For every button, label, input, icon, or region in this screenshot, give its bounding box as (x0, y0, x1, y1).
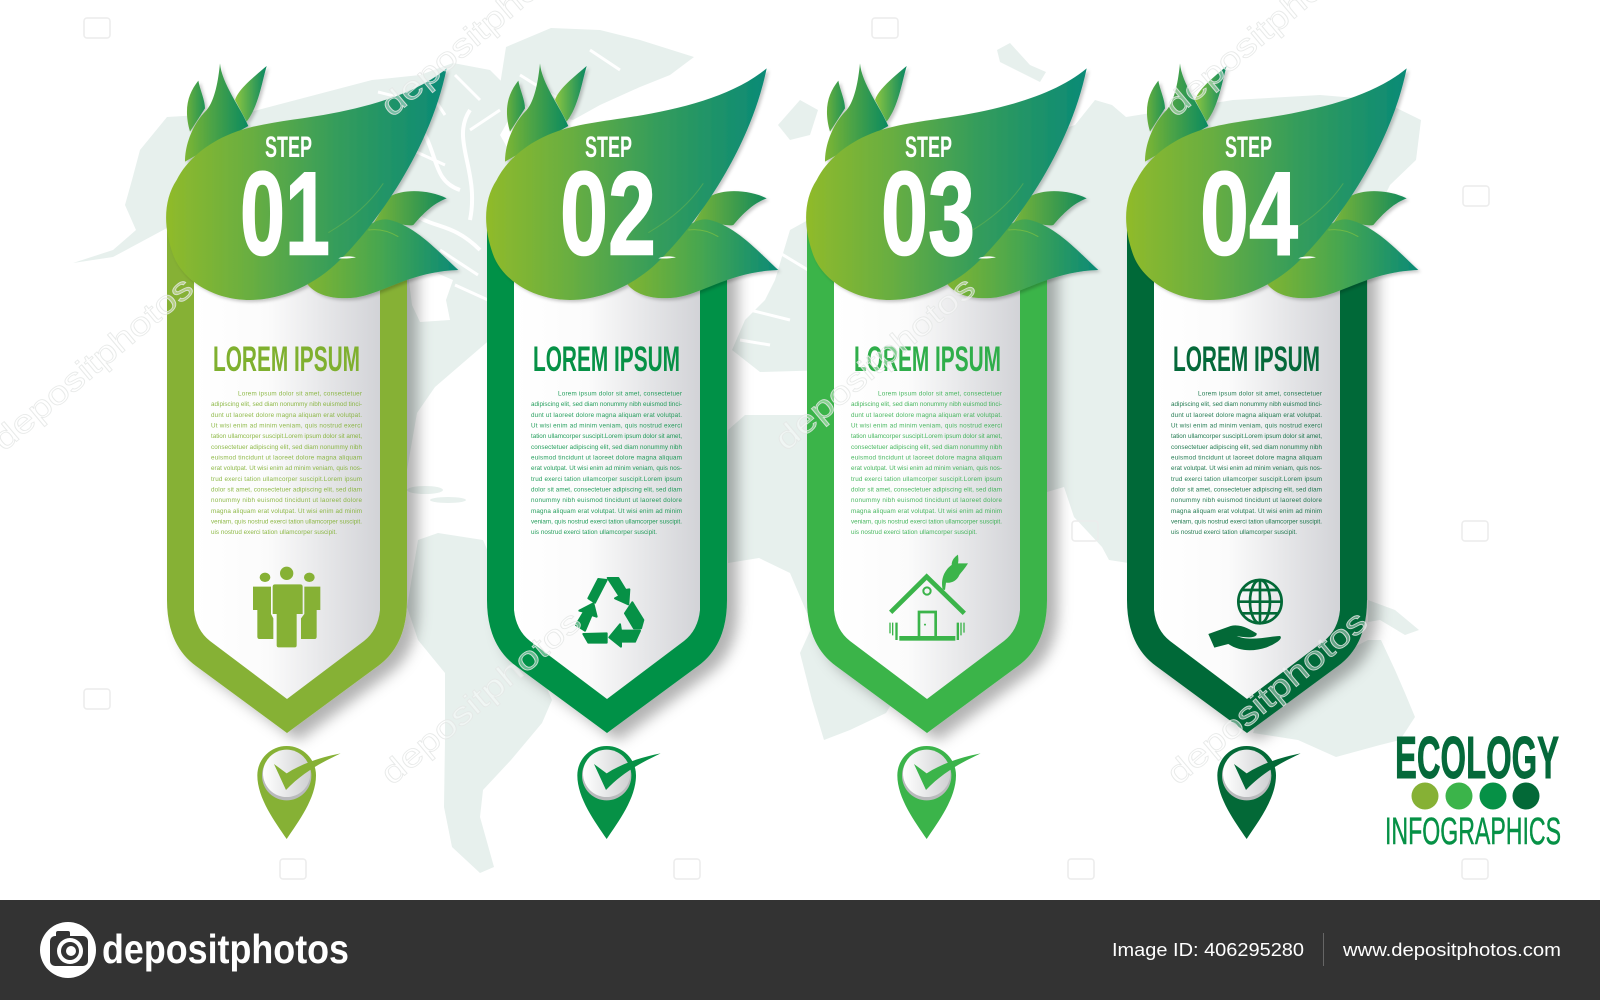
body text 03: tation ullamcorper suscipit.Lorem ipsum dolor sit amet, (851, 433, 1002, 440)
colour dots (1412, 782, 1540, 810)
body text 03: veniam, quis nostrud exerci tation ullamcorper suscipit. (851, 518, 1002, 526)
body text 03: dolor sit amet, consectetuer adipiscing elit, sed diam (851, 486, 1002, 494)
body text 02: magna aliquam erat volutpat. Ut wisi enim ad minim (531, 508, 682, 515)
body text 04: magna aliquam erat volutpat. Ut wisi enim ad minim (1171, 508, 1322, 515)
step number 04: 04 (1200, 148, 1298, 280)
world map (73, 28, 1421, 873)
body text 04: dolor sit amet, consectetuer adipiscing elit, sed diam (1171, 486, 1322, 494)
body text 01: tation ullamcorper suscipit.Lorem ipsum dolor sit amet, (211, 433, 362, 440)
body text 04: trud exerci tation ullamcorper suscipit.Lorem ipsum (1171, 476, 1322, 483)
body text 04: Ut wisi enim ad minim veniam, quis nostrud exerci (1171, 422, 1322, 430)
body text 01: Ut wisi enim ad minim veniam, quis nostrud exerci (211, 422, 362, 430)
body text 01: uis nostrud exerci tation ullamcorper suscipit. (211, 529, 337, 536)
watermark: depositphotos (1159, 603, 1374, 791)
watermark: depositphotos (373, 603, 588, 791)
body text 04: Lorem ipsum dolor sit amet, consectetuer (1198, 390, 1322, 398)
watermark camera marks (84, 18, 1489, 879)
panel body 04 (1127, 212, 1367, 733)
pin marker 04 (1217, 746, 1301, 839)
leaf cluster 04 (1126, 63, 1418, 300)
heading 04: LOREM IPSUM (1173, 340, 1320, 379)
body text 03: erat volutpat. Ut wisi enim ad minim veniam, quis nos- (851, 465, 1002, 472)
watermark (0, 0, 1374, 791)
body text 02: euismod tincidunt ut laoreet dolore magna aliquam (531, 454, 682, 462)
icon: eco house (889, 555, 968, 641)
leaf cluster 01 (166, 63, 458, 300)
body text 01: dunt ut laoreet dolore magna aliquam erat volutpat. (211, 412, 362, 419)
body text 03: consectetuer adipiscing elit, sed diam nonummy nibh (851, 444, 1002, 451)
body text 02 (531, 390, 682, 536)
body text 04: adipiscing elit, sed diam nonummy nibh euismod tinci- (1171, 401, 1322, 408)
panel body 03 (807, 212, 1047, 733)
body text 01: erat volutpat. Ut wisi enim ad minim veniam, quis nos- (211, 465, 362, 472)
pin marker 03 (897, 746, 981, 839)
body text 04: erat volutpat. Ut wisi enim ad minim veniam, quis nos- (1171, 465, 1322, 472)
body text 03: Lorem ipsum dolor sit amet, consectetuer (878, 390, 1002, 398)
pin marker 02 (577, 746, 661, 839)
body text 01: adipiscing elit, sed diam nonummy nibh euismod tinci- (211, 401, 362, 408)
body text 01: nonummy nibh euismod tincidunt ut laoreet dolore (211, 497, 362, 504)
body text 01: veniam, quis nostrud exerci tation ullamcorper suscipit. (211, 518, 362, 526)
body text 03 (851, 390, 1002, 536)
panel: step 03 (806, 63, 1098, 839)
panel: step 02 (486, 63, 778, 839)
body text 01: magna aliquam erat volutpat. Ut wisi enim ad minim (211, 508, 362, 515)
step label 03: STEP (905, 131, 952, 164)
heading 03: LOREM IPSUM (854, 340, 1001, 379)
panel: step 01 (166, 63, 458, 839)
body text 04: nonummy nibh euismod tincidunt ut laoreet dolore (1171, 497, 1322, 504)
body text 03: euismod tincidunt ut laoreet dolore magna aliquam (851, 454, 1002, 462)
body text 04: euismod tincidunt ut laoreet dolore magna aliquam (1171, 454, 1322, 462)
icon: people (253, 567, 320, 647)
body text 03: adipiscing elit, sed diam nonummy nibh euismod tinci- (851, 401, 1002, 408)
body text 02: nonummy nibh euismod tincidunt ut laoreet dolore (531, 497, 682, 504)
step number 03: 03 (881, 148, 975, 280)
heading 01: LOREM IPSUM (213, 340, 360, 379)
panel body 02 (487, 212, 727, 733)
step number 02: 02 (560, 148, 656, 280)
body text 03: Ut wisi enim ad minim veniam, quis nostrud exerci (851, 422, 1002, 430)
body text 04: veniam, quis nostrud exerci tation ullamcorper suscipit. (1171, 518, 1322, 526)
body text 02: trud exerci tation ullamcorper suscipit.Lorem ipsum (531, 476, 682, 483)
body text 02: tation ullamcorper suscipit.Lorem ipsum dolor sit amet, (531, 433, 682, 440)
body text 04: dunt ut laoreet dolore magna aliquam erat volutpat. (1171, 412, 1322, 419)
body text 04: consectetuer adipiscing elit, sed diam nonummy nibh (1171, 444, 1322, 451)
body text 03: trud exerci tation ullamcorper suscipit.Lorem ipsum (851, 476, 1002, 483)
body text 03: dunt ut laoreet dolore magna aliquam erat volutpat. (851, 412, 1002, 419)
body text 02: Ut wisi enim ad minim veniam, quis nostrud exerci (531, 422, 682, 430)
body text 01: euismod tincidunt ut laoreet dolore magna aliquam (211, 454, 362, 462)
leaf cluster 02 (486, 63, 778, 300)
panel body 01 (167, 212, 407, 733)
body text 01: consectetuer adipiscing elit, sed diam nonummy nibh (211, 444, 362, 451)
body text 02: Lorem ipsum dolor sit amet, consectetuer (558, 390, 682, 398)
step label 01: STEP (265, 131, 312, 164)
body text 03: magna aliquam erat volutpat. Ut wisi enim ad minim (851, 508, 1002, 515)
footer bar (0, 900, 1600, 1000)
body text 01: trud exerci tation ullamcorper suscipit.Lorem ipsum (211, 476, 362, 483)
website url: www.depositphotos.com (1342, 939, 1561, 960)
body text 01: dolor sit amet, consectetuer adipiscing elit, sed diam (211, 486, 362, 494)
body text 02: dolor sit amet, consectetuer adipiscing elit, sed diam (531, 486, 682, 494)
heading 02: LOREM IPSUM (533, 340, 680, 379)
body text 02: consectetuer adipiscing elit, sed diam nonummy nibh (531, 444, 682, 451)
step number 01: 01 (240, 148, 330, 280)
body text 02: dunt ut laoreet dolore magna aliquam erat volutpat. (531, 412, 682, 419)
panel: step 04 (1126, 63, 1418, 839)
icon: globe in hand (1208, 580, 1282, 650)
body text 01 (211, 390, 362, 536)
body text 02: erat volutpat. Ut wisi enim ad minim veniam, quis nos- (531, 465, 682, 472)
step label 02: STEP (585, 131, 632, 164)
body text 02: veniam, quis nostrud exerci tation ullamcorper suscipit. (531, 518, 682, 526)
body text 03: nonummy nibh euismod tincidunt ut laoreet dolore (851, 497, 1002, 504)
body text 01: Lorem ipsum dolor sit amet, consectetuer (238, 390, 362, 398)
body text 04 (1171, 390, 1322, 536)
leaf cluster 03 (806, 63, 1098, 300)
body text 04: uis nostrud exerci tation ullamcorper suscipit. (1171, 529, 1297, 536)
ecology infographics logo (1385, 725, 1561, 853)
footer camera logo (40, 922, 96, 978)
pin marker 01 (257, 746, 341, 839)
body text 02: uis nostrud exerci tation ullamcorper suscipit. (531, 529, 657, 536)
watermark: depositphotos (767, 269, 982, 457)
footer brand name: depositphotos (102, 926, 349, 972)
body text 03: uis nostrud exerci tation ullamcorper suscipit. (851, 529, 977, 536)
body text 04: tation ullamcorper suscipit.Lorem ipsum dolor sit amet, (1171, 433, 1322, 440)
icon: recycle (576, 578, 643, 647)
body text 02: adipiscing elit, sed diam nonummy nibh euismod tinci- (531, 401, 682, 408)
step label 04: STEP (1225, 131, 1272, 164)
image id: Image ID: 406295280 (1112, 939, 1304, 960)
